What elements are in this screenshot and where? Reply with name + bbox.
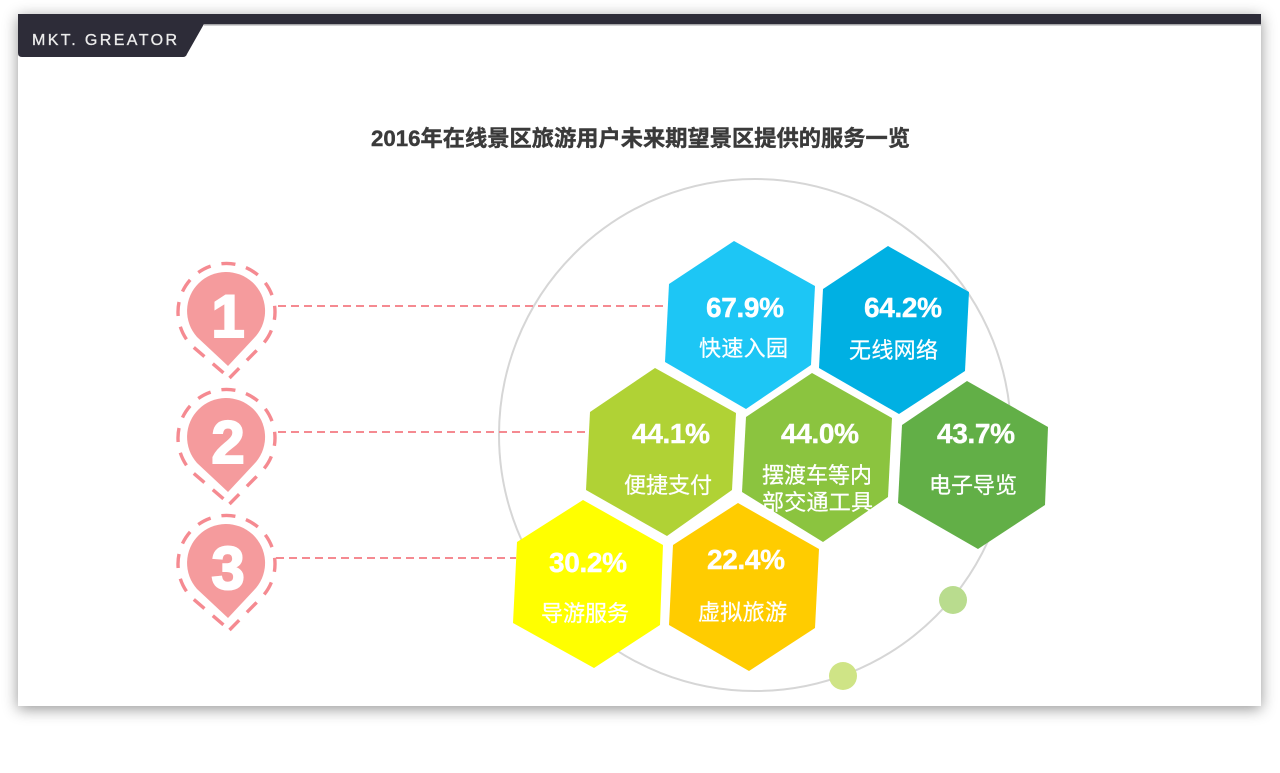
title: 2016年在线景区旅游用户未来期望景区提供的服务一览 <box>371 126 910 151</box>
hexagon: 导游服务 30.2%: 30.2% <box>549 547 627 578</box>
hexagon: 虚拟旅游 22.4%: 虚拟旅游 <box>698 600 787 625</box>
hexagon: 快速入园 67.9%: 67.9% <box>706 292 784 323</box>
hexagon: 摆渡车等内部交通工具 44.0%: 摆渡车等内 <box>762 463 872 488</box>
hexagon: 导游服务 30.2% <box>513 500 663 668</box>
pin marker 3: 3 <box>211 535 245 602</box>
header bar <box>18 14 1261 57</box>
pin marker 2 <box>178 389 275 504</box>
connector line 2 <box>278 431 587 433</box>
hexagon: 虚拟旅游 22.4%: 22.4% <box>707 544 785 575</box>
pin marker 3 <box>178 515 275 630</box>
pin marker 2: 2 <box>211 409 245 476</box>
hexagon: 导游服务 30.2%: 导游服务 <box>541 601 629 626</box>
hexagon: 电子导览 43.7% <box>898 381 1048 549</box>
hexagon: 无线网络 64.2%: 64.2% <box>864 292 942 323</box>
hexagon: 电子导览 43.7%: 43.7% <box>937 418 1015 449</box>
hexagon: 便捷支付 44.1% <box>586 368 736 536</box>
hexagon: 无线网络 64.2% <box>819 246 969 414</box>
hexagon: 电子导览 43.7%: 电子导览 <box>929 473 1017 498</box>
hexagon: 摆渡车等内部交通工具 44.0%: 部交通工具 <box>762 490 873 515</box>
connector line 1 <box>278 305 665 307</box>
logo text: MKT. GREATOR <box>32 32 177 49</box>
hexagon: 便捷支付 44.1%: 44.1% <box>632 418 710 449</box>
hexagon: 摆渡车等内部交通工具 44.0%: 44.0% <box>781 418 859 449</box>
pin marker 1 <box>178 263 275 378</box>
connector line 3 <box>276 557 516 559</box>
hexagon: 摆渡车等内部交通工具 44.0% <box>742 373 892 542</box>
decorative dot: green <box>939 586 967 614</box>
pin marker 1: 1 <box>211 283 245 350</box>
hexagon: 便捷支付 44.1%: 便捷支付 <box>624 473 712 498</box>
hexagon: 快速入园 67.9% <box>665 241 815 409</box>
hexagon: 无线网络 64.2%: 无线网络 <box>849 338 938 363</box>
large outline circle <box>499 179 1011 691</box>
hexagon: 虚拟旅游 22.4% <box>669 503 819 671</box>
hexagon: 快速入园 67.9%: 快速入园 <box>699 336 788 361</box>
decorative dot: lime <box>829 662 857 690</box>
